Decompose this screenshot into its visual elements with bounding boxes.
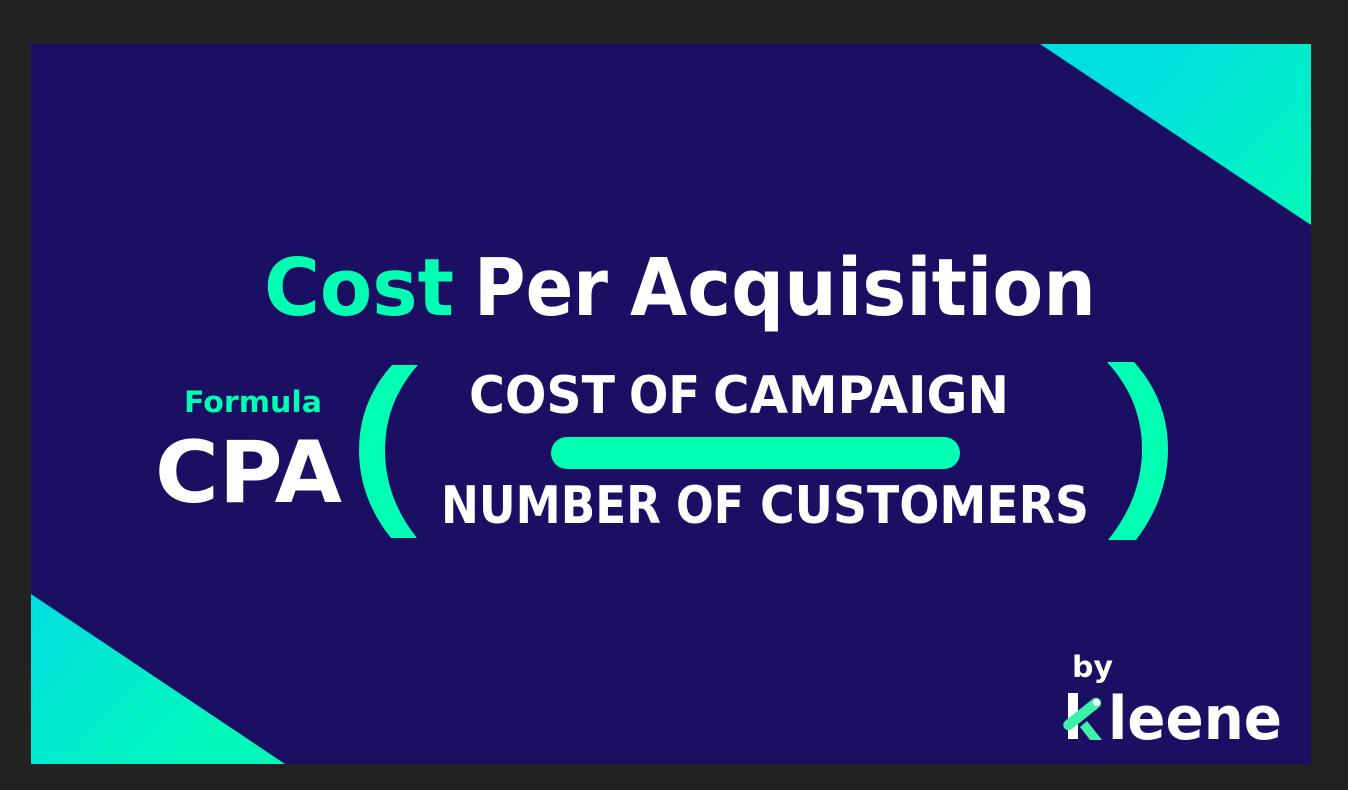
denominator: number of customers: OF [676,476,744,536]
CPA label: CPA [155,423,342,523]
right bracket [1107,362,1168,540]
numerator: cost of campaign: COST [469,366,615,426]
top-right corner triangle [1040,44,1311,225]
bottom-left corner triangle [31,594,285,764]
logo mark: k [1063,693,1102,740]
leene wordmark: leene [1108,684,1282,754]
title: Per [474,242,608,334]
title [264,242,1096,334]
by kleene logo [1063,654,1280,740]
left bracket [359,365,418,538]
title: Cost [264,242,454,334]
numerator: cost of campaign: CAMPAIGN [713,366,1009,426]
fraction bar [551,437,960,469]
numerator: cost of campaign: OF [629,366,700,426]
title: Acquisition [630,242,1096,334]
denominator: number of customers: NUMBER [441,476,661,536]
denominator: number of customers [441,476,1089,536]
denominator: number of customers: CUSTOMERS [760,476,1089,536]
by text: by [1072,650,1113,684]
formula label: Formula [184,385,322,419]
logo mark: k: k [1064,684,1106,754]
numerator: cost of campaign [469,366,1009,426]
